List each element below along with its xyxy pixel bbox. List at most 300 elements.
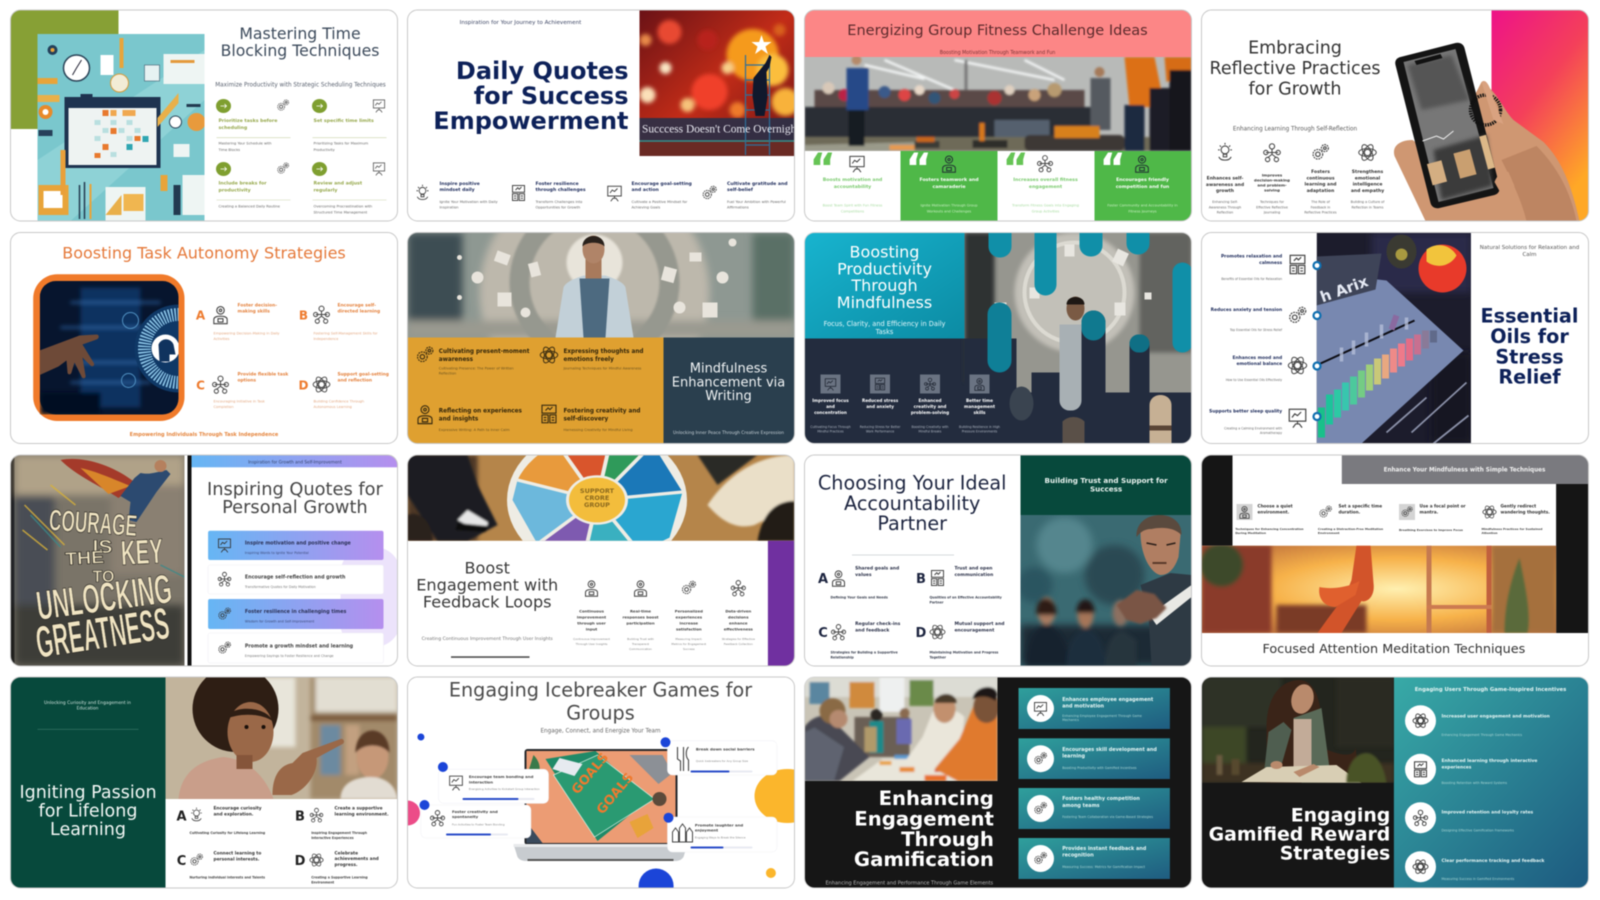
icon: tile xyxy=(970,374,990,394)
item: real-time xyxy=(622,581,659,651)
quote column 4: competition and fun xyxy=(1116,184,1169,190)
icon: gears xyxy=(219,608,230,619)
item: time limits: Set specific time limits xyxy=(314,118,374,124)
item C: Encouraging Initiative in Task xyxy=(214,400,266,404)
benefit 1: Enhancing Engagement Through Game Mechanics xyxy=(1442,733,1522,737)
icon: gear lamp xyxy=(1313,145,1328,159)
quote mark: “ xyxy=(1002,146,1029,192)
item: time management: Pressure Environments xyxy=(962,430,998,434)
item: data-driven: decisions xyxy=(728,614,749,620)
item: creativity: Boosting Creativity with xyxy=(911,425,949,429)
title: Oils for xyxy=(1490,325,1569,348)
quote column 1: Competitions xyxy=(841,210,864,214)
quote mark: “ xyxy=(1100,146,1126,192)
item D: Autonomous Learning xyxy=(314,405,352,409)
item: resilience: through challenges xyxy=(536,187,586,193)
footer: Enhancing Engagement and Performance Through Game Elements xyxy=(826,880,994,886)
item C xyxy=(177,850,265,880)
benefit 4: Clear performance tracking and feedback xyxy=(1442,858,1545,864)
title: Feedback Loops xyxy=(423,593,552,612)
item: creativity xyxy=(911,374,949,434)
icon: tile xyxy=(1399,504,1415,520)
icon: document xyxy=(418,406,432,424)
item C xyxy=(196,372,288,409)
subtitle: Maximize Productivity with Strategic Scheduling Techniques xyxy=(215,82,386,88)
icon: network xyxy=(430,810,445,826)
item: time management xyxy=(959,374,1000,434)
item A xyxy=(176,806,266,835)
item B: Qualities of an Effective Accountability xyxy=(930,596,1003,600)
icon: person xyxy=(832,571,844,586)
title: Engaging xyxy=(1291,805,1390,827)
quote row 3 xyxy=(208,599,384,629)
icon: graduate globe xyxy=(1359,143,1376,162)
benefit 2 xyxy=(1018,738,1170,779)
icon: board xyxy=(850,156,864,172)
icon: tile xyxy=(1236,504,1252,520)
title: Writing xyxy=(705,389,752,404)
item: personalized: Personalized xyxy=(675,608,703,614)
panel: yellow benefit block xyxy=(408,338,664,444)
item B: Encourage self- xyxy=(338,302,376,308)
icon: gears xyxy=(278,100,289,110)
item: focal point xyxy=(1399,504,1467,532)
item A xyxy=(196,302,280,341)
item: expressing thoughts xyxy=(540,345,644,370)
title: Boost xyxy=(464,558,510,578)
item: personalized: Success xyxy=(683,647,695,651)
item: time duration: Environment xyxy=(1318,531,1340,535)
image: laptop with soccer field: GOALS xyxy=(569,750,612,798)
item A: Activities xyxy=(214,337,230,341)
title: Embracing xyxy=(1248,38,1342,58)
item: creativity: Fostering creativity and xyxy=(564,408,640,414)
quote column 1 xyxy=(812,152,882,214)
item: focus: Improved focus xyxy=(812,398,849,403)
item: time management: Better time xyxy=(966,398,993,403)
icon: tile xyxy=(870,374,890,394)
item: focus: Cultivating Focus Through xyxy=(810,425,851,429)
icon: people xyxy=(634,581,646,596)
item C xyxy=(818,621,901,660)
item D: progress. xyxy=(334,862,358,868)
panel: Choosing Your Ideal Accountability Partner xyxy=(804,455,1192,666)
title: Groups xyxy=(566,701,635,724)
item: redirect thoughts: wandering thoughts. xyxy=(1500,510,1550,514)
connector dot xyxy=(1314,312,1320,319)
item: inspire: mindset daily xyxy=(440,187,475,193)
subtitle: Education xyxy=(77,706,99,712)
item: data-driven: Feedback Collection xyxy=(724,642,753,646)
subtitle: Engage, Connect, and Energize Your Team xyxy=(540,728,661,734)
item: personalized xyxy=(671,581,707,651)
title: Engagement xyxy=(854,807,994,830)
item: present-moment: Reflection xyxy=(439,372,456,376)
item: anxiety: Top Essential Oils for Stress Relief xyxy=(1229,328,1283,332)
item D: Creating a Supportive Learning xyxy=(311,876,368,880)
image: team around a game table xyxy=(804,676,998,782)
icon: trophy xyxy=(1136,156,1148,172)
item: resilience: Transform Challenges into xyxy=(534,200,582,204)
benefit 1: Mechanics xyxy=(1062,718,1079,722)
item: self-awareness: awareness and xyxy=(1206,182,1244,188)
icon: tile xyxy=(920,374,940,394)
title: Essential xyxy=(1481,304,1578,328)
connector dot xyxy=(1314,413,1320,420)
item A: Cultivating Curiosity for Lifelong Learning xyxy=(190,831,266,835)
item: inspire: Inspire positive xyxy=(440,181,480,187)
quote row 2 xyxy=(208,565,384,594)
image: data tablet with apple: h Arix xyxy=(1318,272,1371,306)
item A: making skills xyxy=(238,308,270,314)
quote column 4: Encourages friendly xyxy=(1116,177,1169,183)
item: emotional intelligence: intelligence xyxy=(1353,182,1382,188)
connector dot xyxy=(1314,362,1320,370)
benefit 4: Measuring Success: Metrics for Gamification Impact xyxy=(1062,865,1146,869)
quote column 1: Boosts motivation and xyxy=(823,177,882,183)
title: Engagement with xyxy=(416,576,558,595)
item: stress: Work Performance xyxy=(866,430,894,434)
item A xyxy=(818,566,899,600)
quote column 2: camaraderie xyxy=(932,184,966,190)
quote column 2: Fosters teamwork and xyxy=(919,177,979,183)
item A: Defining Your Goals and Needs xyxy=(830,596,888,600)
item: mood: emotional balance xyxy=(1237,361,1282,367)
item: continuous improvement: improvement xyxy=(577,614,606,620)
item: self-awareness: Enhancing Self- xyxy=(1212,200,1239,204)
icon: network xyxy=(314,306,329,323)
icon: network xyxy=(213,376,228,393)
item D: achievements and xyxy=(334,856,379,862)
badge xyxy=(420,800,430,810)
item D xyxy=(295,850,379,884)
title: Stress xyxy=(1495,345,1564,368)
panel: Igniting Passion for Lifelong Learning xyxy=(10,666,398,888)
icon: arrow badge xyxy=(312,162,327,176)
title: Gamification xyxy=(854,848,994,871)
benefit 2: Encourages skill development and xyxy=(1062,747,1157,753)
item: breaks: Creating a Balanced Daily Routine xyxy=(218,204,281,208)
gradient side block xyxy=(1492,10,1588,221)
item D xyxy=(916,621,1004,660)
panel: Boost Engagement with Feedback Loops xyxy=(408,428,795,667)
quote column 3: Increases overall fitness xyxy=(1013,177,1078,183)
item: prioritize: Time Blocks xyxy=(218,148,240,152)
title: Igniting Passion xyxy=(19,783,157,803)
item B xyxy=(295,806,389,840)
subtitle: Natural Solutions for Relaxation and xyxy=(1480,245,1579,251)
badge xyxy=(660,737,670,747)
item: data-driven: effectiveness xyxy=(724,626,754,632)
icon: lightbulb gear xyxy=(191,854,202,865)
title: Enhancing xyxy=(879,787,994,810)
item: expressing thoughts: Expressing thoughts and xyxy=(564,349,644,355)
panel: dark title block xyxy=(664,338,794,444)
title: Learning xyxy=(50,820,126,840)
title: Relief xyxy=(1498,366,1561,389)
icon: tile xyxy=(820,374,840,394)
card: creativity: Fun Activities to Foster Team Bonding xyxy=(452,822,505,826)
title: Blocking Techniques xyxy=(221,41,379,60)
letter C: C xyxy=(177,854,186,869)
item: mood: How to Use Essential Oils Effectively xyxy=(1226,378,1282,382)
image: laptop with soccer field: GOALS xyxy=(594,770,637,818)
item: time limits: Prioritizing Tasks for Maximum xyxy=(314,142,369,146)
quote column 3 xyxy=(998,146,1094,221)
item: redirect thoughts: Gently redirect xyxy=(1500,504,1536,508)
item: personalized: experiences xyxy=(676,614,703,620)
panel: Mastering Time Blocking Techniques xyxy=(10,10,398,221)
quote row 2: Transformative Quotes for Daily Motivation xyxy=(244,585,316,589)
item B: communication xyxy=(954,572,993,578)
item: gratitude: self-belief xyxy=(727,187,754,193)
title: Reflective Practices xyxy=(1210,59,1380,79)
decorative circles xyxy=(395,734,820,900)
card: social barriers xyxy=(668,741,777,775)
item: anxiety: Reduces anxiety and tension xyxy=(1211,307,1282,313)
item: self-awareness: Enhances self- xyxy=(1207,176,1243,182)
letter D: D xyxy=(299,378,309,392)
image: superhero poster xyxy=(10,454,192,666)
top band text: Inspiration for Growth and Self-Improvement xyxy=(248,460,342,464)
card: laughter: enjoyment xyxy=(695,828,718,833)
item: mood: Enhances mood and xyxy=(1233,355,1282,361)
item: time duration: Set a specific time xyxy=(1338,504,1382,508)
title: Mindfulness xyxy=(690,362,767,376)
item: creativity: Harnessing Creativity for Mindful Living xyxy=(564,428,633,432)
panel: Mindfulness Enhancement via Writing xyxy=(408,178,794,444)
item D: Maintaining Motivation and Progress xyxy=(930,650,998,654)
item: data-driven: enhance xyxy=(729,620,748,626)
quote column 3: Transform Fitness Goals into Engaging xyxy=(1011,204,1079,208)
item D: and reflection xyxy=(338,378,372,384)
image: support group wheel on wood floor: CRORE xyxy=(585,494,609,502)
title: Enhancement via xyxy=(672,376,785,390)
item: redirect thoughts: Mindfulness Practices for Sustained xyxy=(1482,527,1542,531)
item: resilience: Opportunities for Growth xyxy=(536,205,580,209)
title: Boosting Task Autonomy Strategies xyxy=(62,243,346,262)
progress bar xyxy=(690,770,752,772)
benefit 2: experiences xyxy=(1442,765,1472,771)
icon: board xyxy=(373,163,385,175)
item: real-time: Building Trust with xyxy=(627,637,654,641)
benefit 3 xyxy=(1018,788,1170,829)
subtitle: Focus, Clarity, and Efficiency in Daily xyxy=(824,320,946,328)
icon: atom xyxy=(313,375,330,394)
benefit 1: Enhancing Employee Engagement Through Game xyxy=(1062,714,1142,718)
item: resilience xyxy=(512,181,586,209)
item: sleep: Creating a Calming Environment with xyxy=(1224,426,1282,430)
item: continuous improvement: Continuous Improvement xyxy=(573,637,611,641)
benefit 2: learning xyxy=(1062,753,1086,759)
footer tagline: Empowering Individuals Through Task Independence xyxy=(130,432,279,438)
item: personalized: Measuring Impact: xyxy=(675,637,702,641)
icon: gears xyxy=(219,642,230,653)
item: stress: Reducing Stress for Better xyxy=(860,425,901,429)
item D: encouragement xyxy=(954,627,995,633)
item: time limits: Productivity xyxy=(314,148,336,152)
icon: flower xyxy=(930,624,945,640)
item: decision making: Improves xyxy=(1262,172,1283,178)
item: goal-setting: Cultivate a Positive Mindset for xyxy=(632,200,688,204)
item: reflecting xyxy=(418,406,523,432)
item B xyxy=(299,302,380,341)
icon: brain xyxy=(1290,255,1305,274)
item: inspire: Ignite Your Motivation with Daily xyxy=(440,200,498,204)
item: time management: management xyxy=(964,404,995,409)
icon: gears xyxy=(1320,506,1332,517)
icon: graduate xyxy=(310,853,323,867)
item: personalized: satisfaction xyxy=(676,626,702,632)
icon circle xyxy=(1405,754,1436,785)
badge xyxy=(438,762,448,772)
item: breaks xyxy=(216,162,290,208)
black bar left xyxy=(1202,455,1232,546)
progress bar xyxy=(690,846,752,848)
image: flat-lay scheduling desk xyxy=(36,33,206,222)
item C: Regular check-ins xyxy=(855,621,901,627)
icon: people xyxy=(586,581,598,596)
benefit 1 xyxy=(1018,688,1170,729)
item: emotional intelligence: Building a Culture of xyxy=(1351,200,1385,204)
icon: board xyxy=(608,186,621,201)
item: decision making: solving xyxy=(1264,188,1280,192)
item C: options xyxy=(238,378,256,384)
title: Engaging Icebreaker Games for xyxy=(449,679,752,702)
item: time duration: Creating a Distraction-Free Meditation xyxy=(1318,527,1383,531)
subtitle: Unlocking Curiosity and Engagement in xyxy=(44,700,131,706)
item: sleep: Supports better sleep quality xyxy=(1209,408,1282,414)
item: focal point: Use a focal point or xyxy=(1420,504,1467,508)
card: team bonding: interaction xyxy=(469,779,493,784)
card: creativity xyxy=(421,805,531,838)
title: for Lifelong xyxy=(39,802,137,822)
title: Accountability xyxy=(844,492,980,515)
letter C: C xyxy=(818,626,828,641)
item: present-moment xyxy=(418,347,530,376)
item: stress: and anxiety xyxy=(866,404,894,409)
title: Through xyxy=(850,276,918,295)
panel: Engaging Icebreaker Games for Groups xyxy=(395,677,820,900)
item D: Celebrate xyxy=(334,850,358,856)
title: Productivity xyxy=(837,259,932,278)
item: inspire xyxy=(416,181,498,209)
divider xyxy=(852,554,954,556)
image: robot race in a hall xyxy=(804,56,1192,152)
item: emotional intelligence xyxy=(1351,143,1385,209)
card: creativity: spontaneity xyxy=(452,814,479,819)
image: superhero poster: TO xyxy=(92,567,114,586)
item D: Mutual support and xyxy=(954,621,1004,627)
icon: fingerprint xyxy=(1483,505,1496,519)
item: decision making xyxy=(1254,144,1290,215)
item A: Encourage curiosity xyxy=(214,806,262,812)
image: yoga silhouette in warm light xyxy=(1201,544,1557,634)
card: creativity: Foster creativity and xyxy=(452,809,498,814)
item: prioritize: Mastering Your Schedule with xyxy=(218,142,272,146)
item: continuous learning xyxy=(1304,145,1337,215)
image: woman working at a table xyxy=(1202,678,1394,784)
title: Gamified Reward xyxy=(1209,824,1390,846)
item: sleep xyxy=(1209,408,1320,435)
title: Partner xyxy=(877,512,947,535)
title: Through xyxy=(901,828,994,851)
quote column 2 xyxy=(900,146,998,221)
icon circle xyxy=(1027,695,1054,722)
benefit 4 xyxy=(1018,838,1170,879)
black bar right xyxy=(1556,484,1588,633)
icon: arrow badge xyxy=(312,99,327,113)
quote row 1: Inspire motivation and positive change xyxy=(245,540,352,546)
title: Mindfulness xyxy=(837,293,932,312)
image: hand holding phone xyxy=(1394,43,1580,221)
item: data-driven: Data-driven xyxy=(725,608,751,614)
panel: Inspiring Quotes for Personal Growth xyxy=(10,455,400,668)
icon: bottles xyxy=(1289,409,1306,428)
item: self-awareness xyxy=(1206,143,1244,215)
item C: and feedback xyxy=(855,627,890,633)
item: focal point: mantra. xyxy=(1420,510,1439,514)
icon: fitness xyxy=(943,156,955,172)
olive accent block xyxy=(10,10,118,129)
icon: board xyxy=(218,539,230,552)
item: goal-setting: Achieving Goals xyxy=(632,205,660,209)
item: inspire: Inspiration xyxy=(440,205,459,209)
panel: Daily Quotes for Success Empowerment xyxy=(408,10,800,221)
title: Empowerment xyxy=(433,107,628,135)
quote mark: “ xyxy=(810,146,836,192)
item: data-driven: Strategies for Effective xyxy=(722,637,755,641)
benefit 3: among teams xyxy=(1062,803,1100,809)
title: Focused Attention Meditation Techniques xyxy=(1262,642,1526,657)
image: man in front of paper wheel with drip mask xyxy=(964,222,1192,452)
icon: gears xyxy=(703,186,716,199)
item B: Inspiring Engagement Through xyxy=(311,831,368,835)
image: child pointing in classroom xyxy=(165,676,398,800)
icon: bulb xyxy=(1218,143,1232,160)
item: self-awareness: Awareness Through xyxy=(1209,205,1241,209)
item C: Nurturing Individual Interests and Talents xyxy=(190,876,265,880)
icon: brain xyxy=(540,345,558,365)
letter B: B xyxy=(299,308,308,322)
title: Inspiring Quotes for xyxy=(207,479,384,500)
item: time limits xyxy=(312,99,386,152)
quote column 2: Ignite Motivation Through Group xyxy=(921,204,978,208)
purple side bar xyxy=(768,541,795,667)
letter A: A xyxy=(196,308,206,322)
benefit 2 xyxy=(1405,754,1537,785)
title: Personal Growth xyxy=(222,497,368,518)
title: Daily Quotes xyxy=(456,57,628,85)
icon: barbell xyxy=(1037,156,1053,172)
item: continuous learning: continuous xyxy=(1306,175,1335,181)
item B: Trust and open xyxy=(954,566,992,572)
icon: person xyxy=(214,307,227,324)
item: redirect thoughts xyxy=(1482,504,1550,535)
quote row 3: Wisdom for Growth and Self-Improvement xyxy=(245,620,315,624)
icon: book xyxy=(512,186,524,200)
item: decision making: Techniques for xyxy=(1259,200,1285,204)
card: team bonding xyxy=(438,769,548,803)
benefit 4: Measuring Success in Gamified Environments xyxy=(1442,877,1515,881)
item: review: Review and adjust xyxy=(314,180,363,186)
gradient content block xyxy=(1394,677,1589,888)
item B: Independence xyxy=(314,337,338,341)
image: support group wheel on wood floor xyxy=(407,454,795,542)
card: team bonding: Encourage team bonding and xyxy=(469,774,534,779)
icon: gears xyxy=(682,581,696,594)
item: focus xyxy=(810,374,851,434)
